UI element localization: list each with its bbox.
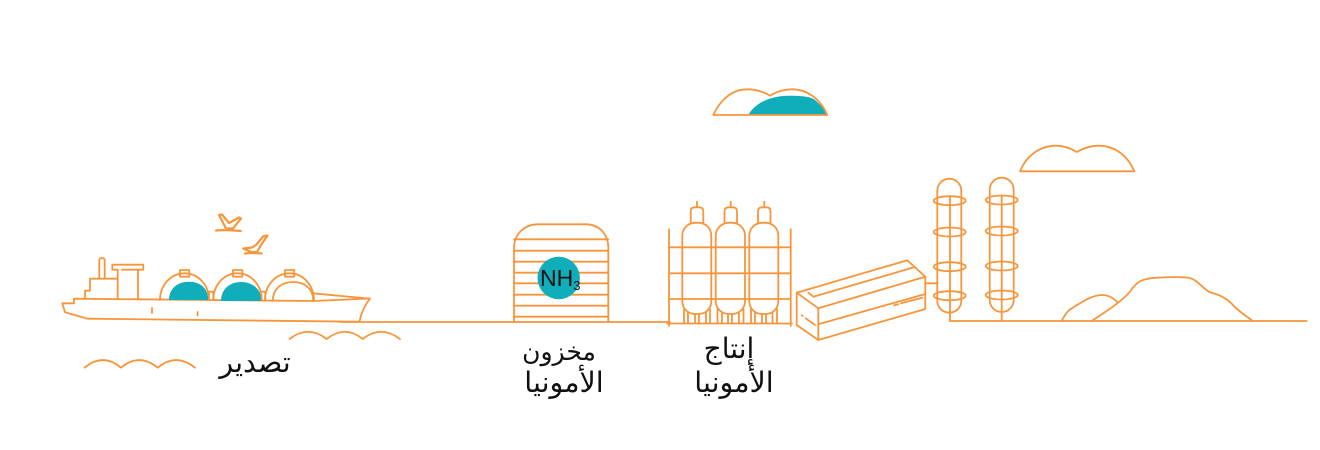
icon: ship — [62, 258, 370, 322]
label: ammonia storage — [522, 337, 604, 399]
ship bow deck — [313, 293, 368, 298]
production vessel 1 — [682, 202, 711, 323]
icon: ammonia storage tank — [514, 224, 608, 322]
storage tank bands — [514, 239, 608, 317]
icon: column 1 — [934, 179, 966, 321]
cloud: top with teal fill — [713, 89, 827, 115]
bird 2 — [243, 236, 268, 254]
production vessel 2 — [716, 202, 745, 323]
label: ammonia production: الأمونيا — [694, 364, 774, 399]
icon: hills — [1062, 277, 1253, 321]
icon: converter box — [797, 260, 937, 340]
ship superstructure — [85, 258, 143, 300]
small hill — [1062, 295, 1118, 321]
ground line: right section — [950, 320, 1307, 322]
label: ammonia storage: الأمونيا — [524, 364, 604, 399]
waves: near ship — [290, 332, 400, 339]
icon: birds — [216, 214, 268, 254]
label: ammonia production — [694, 332, 774, 399]
icon: ammonia production — [667, 202, 792, 326]
connector to columns — [925, 282, 937, 284]
label: export: تصدير — [217, 346, 291, 379]
icon: column 2 — [986, 178, 1018, 321]
bird 1 — [216, 214, 241, 231]
label: ammonia production: إنتاج — [704, 332, 754, 366]
ship tank 1 — [160, 270, 209, 300]
large hill — [1092, 277, 1253, 321]
production vessel 3 — [749, 202, 778, 323]
NH3 badge: 3 — [573, 278, 580, 293]
column 2 rings — [986, 196, 1018, 300]
storage tank outline — [514, 224, 608, 322]
NH3 badge — [538, 257, 580, 299]
ship hull marks — [152, 308, 198, 316]
ship hull — [62, 298, 370, 322]
ground line: left section — [340, 321, 670, 323]
cloud: right — [1020, 146, 1134, 171]
label: ammonia storage: مخزون — [522, 337, 596, 367]
ship tank 2 — [213, 270, 262, 301]
NH3 badge: NH — [540, 265, 573, 291]
ship tank connectors — [209, 292, 265, 300]
column 1 rings — [934, 196, 966, 300]
ship tank 3 — [265, 270, 314, 301]
waves: lower left — [84, 360, 195, 368]
production frame — [667, 229, 792, 326]
